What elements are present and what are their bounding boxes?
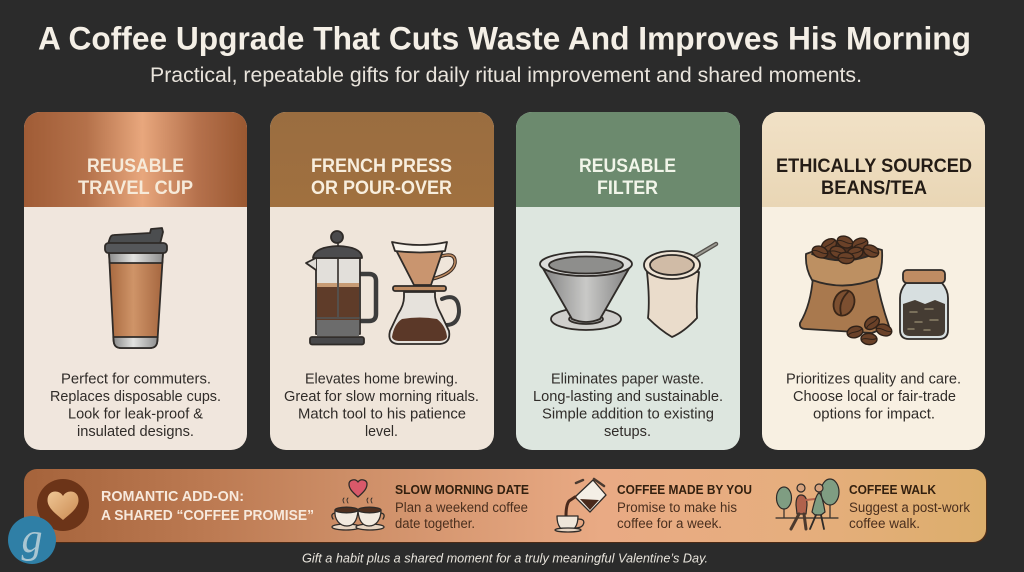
text: coffee walk: COFFEE WALK bbox=[849, 482, 937, 497]
heading: french press or pour-over: FRENCH PRESS bbox=[311, 156, 452, 177]
description: french press: Great for slow morning rituals. bbox=[284, 388, 479, 405]
heading: ethically sourced beans/tea: ETHICALLY SOURCED bbox=[776, 156, 972, 177]
heading: romantic add-on: A SHARED “COFFEE PROMISE” bbox=[101, 507, 314, 524]
icon: sack of coffee beans bbox=[800, 234, 893, 345]
icon: jar of tea leaves bbox=[900, 270, 948, 339]
icon: watermark logo: g bbox=[22, 516, 42, 562]
description: french press bbox=[284, 370, 479, 440]
panel: reusable filter bbox=[516, 112, 740, 450]
heading: reusable filter bbox=[579, 156, 676, 199]
text: slow morning date: Plan a weekend coffee bbox=[395, 500, 528, 515]
heading: reusable filter: REUSABLE bbox=[579, 156, 676, 177]
description: filter bbox=[533, 370, 723, 440]
icon: two cups and heart bbox=[332, 480, 384, 530]
heading: reusable travel cup: REUSABLE bbox=[87, 156, 184, 177]
icon: watermark logo bbox=[8, 516, 56, 564]
subtitle: Practical, repeatable gifts for daily ritual improvement and shared moments. bbox=[150, 64, 862, 87]
heading: french press or pour-over: OR POUR-OVER bbox=[311, 178, 452, 199]
text: coffee walk: Suggest a post-work bbox=[849, 500, 970, 515]
description: beans: options for impact. bbox=[813, 406, 935, 422]
icon: couple walking among trees bbox=[776, 479, 839, 529]
description: beans: Choose local or fair-trade bbox=[793, 388, 956, 405]
text: slow morning date bbox=[395, 482, 529, 531]
card header: travel cup bbox=[24, 112, 247, 207]
text: slow morning date: date together. bbox=[395, 516, 475, 531]
text: coffee made by you bbox=[617, 482, 752, 531]
heading: ethically sourced beans/tea bbox=[776, 156, 972, 199]
description: filter: Eliminates paper waste. bbox=[551, 370, 704, 388]
description: travel cup: Look for leak-proof & bbox=[68, 406, 203, 422]
description: french press: Match tool to his patience bbox=[298, 406, 466, 422]
heading: romantic add-on bbox=[101, 488, 314, 524]
icon: french press bbox=[306, 231, 376, 344]
description: filter: Long-lasting and sustainable. bbox=[533, 388, 723, 405]
text: coffee walk: coffee walk. bbox=[849, 516, 920, 531]
icon: coffee pot pouring into cup bbox=[555, 479, 606, 532]
panel: ethically sourced beans and tea bbox=[762, 112, 985, 450]
description: french press: level. bbox=[365, 423, 398, 440]
text: slow morning date: SLOW MORNING DATE bbox=[395, 482, 529, 497]
description: filter: setups. bbox=[604, 423, 651, 440]
text: coffee made by you: Promise to make his bbox=[617, 500, 737, 515]
heading: reusable travel cup: TRAVEL CUP bbox=[78, 178, 193, 199]
heading: reusable filter: FILTER bbox=[597, 178, 658, 199]
card header: beans bbox=[762, 112, 985, 207]
description: beans bbox=[786, 370, 961, 422]
heading: ethically sourced beans/tea: BEANS/TEA bbox=[821, 178, 927, 199]
card header: filter bbox=[516, 112, 740, 207]
description: travel cup bbox=[50, 370, 221, 440]
icon: travel cup bbox=[105, 228, 167, 348]
icon: heart badge bbox=[37, 479, 89, 531]
description: travel cup: Perfect for commuters. bbox=[61, 370, 211, 388]
heading: reusable travel cup bbox=[78, 156, 193, 199]
title: A Coffee Upgrade That Cuts Waste And Improves His Morning bbox=[38, 20, 971, 56]
panel: french press or pour-over bbox=[270, 112, 494, 450]
caption: Gift a habit plus a shared moment for a truly meaningful Valentine’s Day. bbox=[302, 550, 708, 566]
panel: reusable travel cup bbox=[24, 112, 247, 450]
description: travel cup: Replaces disposable cups. bbox=[50, 388, 221, 405]
heading: french press or pour-over bbox=[311, 156, 452, 199]
card header: french press bbox=[270, 112, 494, 207]
banner: romantic add-on bbox=[24, 469, 987, 543]
description: french press: Elevates home brewing. bbox=[305, 370, 458, 388]
text: coffee made by you: coffee for a week. bbox=[617, 516, 722, 531]
icon: metal cone filter bbox=[540, 252, 632, 330]
description: beans: Prioritizes quality and care. bbox=[786, 370, 961, 388]
heading: romantic add-on: ROMANTIC ADD-ON: bbox=[101, 488, 244, 505]
icon: pour-over dripper and carafe bbox=[389, 242, 459, 344]
icon: cloth filter bbox=[644, 244, 716, 337]
text: coffee made by you: COFFEE MADE BY YOU bbox=[617, 482, 752, 497]
description: filter: Simple addition to existing bbox=[542, 406, 714, 422]
description: travel cup: insulated designs. bbox=[77, 423, 194, 440]
text: coffee walk bbox=[849, 482, 970, 531]
